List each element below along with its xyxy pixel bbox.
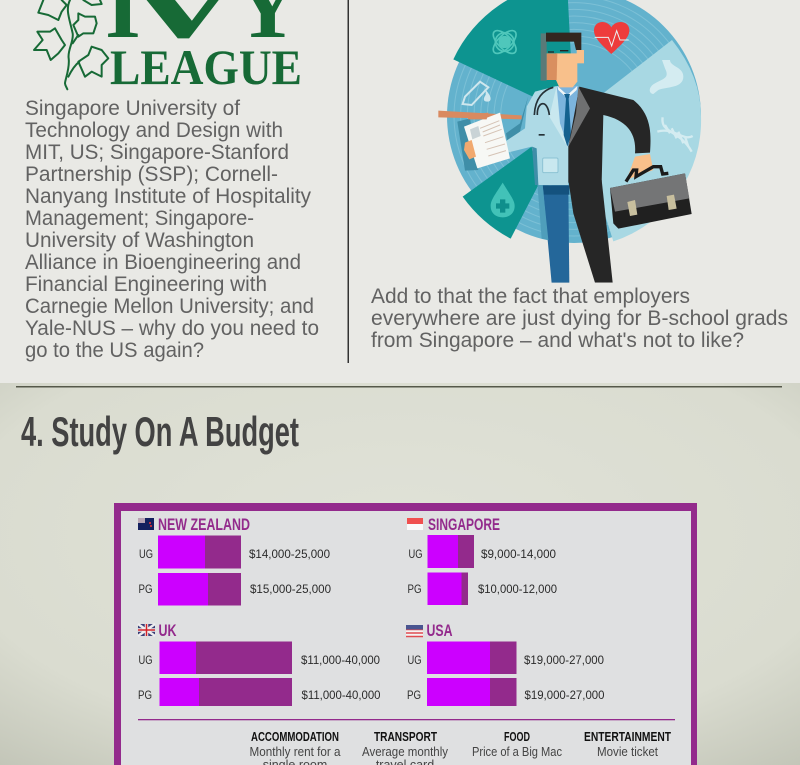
flag: New Zealand [138,518,154,530]
Singapore: $9,000-14,000 [481,547,556,561]
icon: test tube [463,82,490,105]
text block: Singapore partnerships: MIT, US; Singapore-Stanford [25,141,289,164]
text block: employers: Add to that the fact that employers [371,285,690,308]
New Zealand [138,516,331,606]
USA: UG [408,653,422,667]
text block: Singapore partnerships [25,97,319,362]
table header: entertainment: ENTERTAINMENT [584,729,671,744]
logo: Ivy League: LEAGUE [110,39,302,95]
New Zealand: $15,000-25,000 [250,582,331,596]
New Zealand: UG [139,547,153,561]
text block: employers: everywhere are just dying for B-school grads [371,307,788,330]
USA [406,622,605,706]
table header: accommodation: ACCOMMODATION [251,729,339,744]
text block: employers [371,285,788,352]
text block: Singapore partnerships: Alliance in Bioengineering and [25,251,301,274]
table header: entertainment: Movie ticket [597,745,658,759]
table header: accommodation [250,729,341,765]
legs [543,185,569,283]
table header: food: FOOD [504,729,530,744]
UK [138,622,381,706]
lab coat [506,96,528,142]
icon: ivy vine [34,0,108,89]
icon: stomach [650,60,683,94]
pocket [543,158,558,173]
illustration: doctor businessman [438,0,701,283]
shirt and tie [557,86,578,147]
UK: $11,000-40,000 [302,688,381,702]
clipboard and arm [438,111,522,119]
Singapore: UG [408,547,422,561]
table header: transport: TRANSPORT [374,729,437,744]
USA: USA [426,622,453,640]
logo: Ivy League [34,0,302,95]
suit [568,87,651,183]
flag: Singapore [407,518,423,530]
icon: heart [594,22,629,54]
UK: UG [138,653,152,667]
heading: 4. Study On A Budget [21,408,299,455]
USA: $19,000-27,000 [524,653,604,667]
text block: Singapore partnerships: Yale-NUS – why do you need to [25,317,319,340]
USA: PG [407,688,421,702]
icon: medical drop [491,183,515,217]
UK: PG [138,688,152,702]
New Zealand: $14,000-25,000 [249,547,330,561]
stethoscope [534,87,553,115]
flag: USA [406,625,423,637]
text block: Singapore partnerships: Financial Engineering with [25,273,267,296]
text block: Singapore partnerships: University of Washington [25,229,254,252]
text block: employers: from Singapore – and what's not to like? [371,329,744,352]
Singapore: SINGAPORE [428,516,500,534]
text block: Singapore partnerships: Carnegie Mellon University; and [25,295,314,318]
flag: UK [138,624,155,636]
table header: entertainment [584,729,671,759]
base wheel [447,0,701,243]
text block: Singapore partnerships: Singapore University of [25,97,240,120]
table header: food [472,729,562,759]
text block: Singapore partnerships: Nanyang Institute of Hospitality [25,185,311,208]
text block: Singapore partnerships: Partnership (SSP); Cornell- [25,163,278,186]
New Zealand: PG [138,582,152,596]
UK: $11,000-40,000 [301,653,380,667]
Singapore [407,516,557,605]
text block: Singapore partnerships: go to the US again? [25,339,204,362]
table header: transport [362,729,449,765]
table header: transport: Average monthly [362,745,449,759]
UK: UK [158,622,177,640]
figure: doctor and businessman [438,33,692,283]
icon: atom [490,27,520,57]
table header: food: Price of a Big Mac [472,745,562,759]
New Zealand: NEW ZEALAND [158,516,250,534]
icon: DNA [657,117,693,152]
text block: Singapore partnerships: Technology and Design with [25,119,283,142]
panel: cost comparison [114,503,697,765]
Singapore: $10,000-12,000 [478,582,557,596]
head [556,53,577,87]
Singapore: PG [408,582,422,596]
briefcase [627,154,653,180]
USA: $19,000-27,000 [524,688,605,702]
table header: accommodation: Monthly rent for a [250,745,341,759]
text block: Singapore partnerships: Management; Singapore- [25,207,254,230]
